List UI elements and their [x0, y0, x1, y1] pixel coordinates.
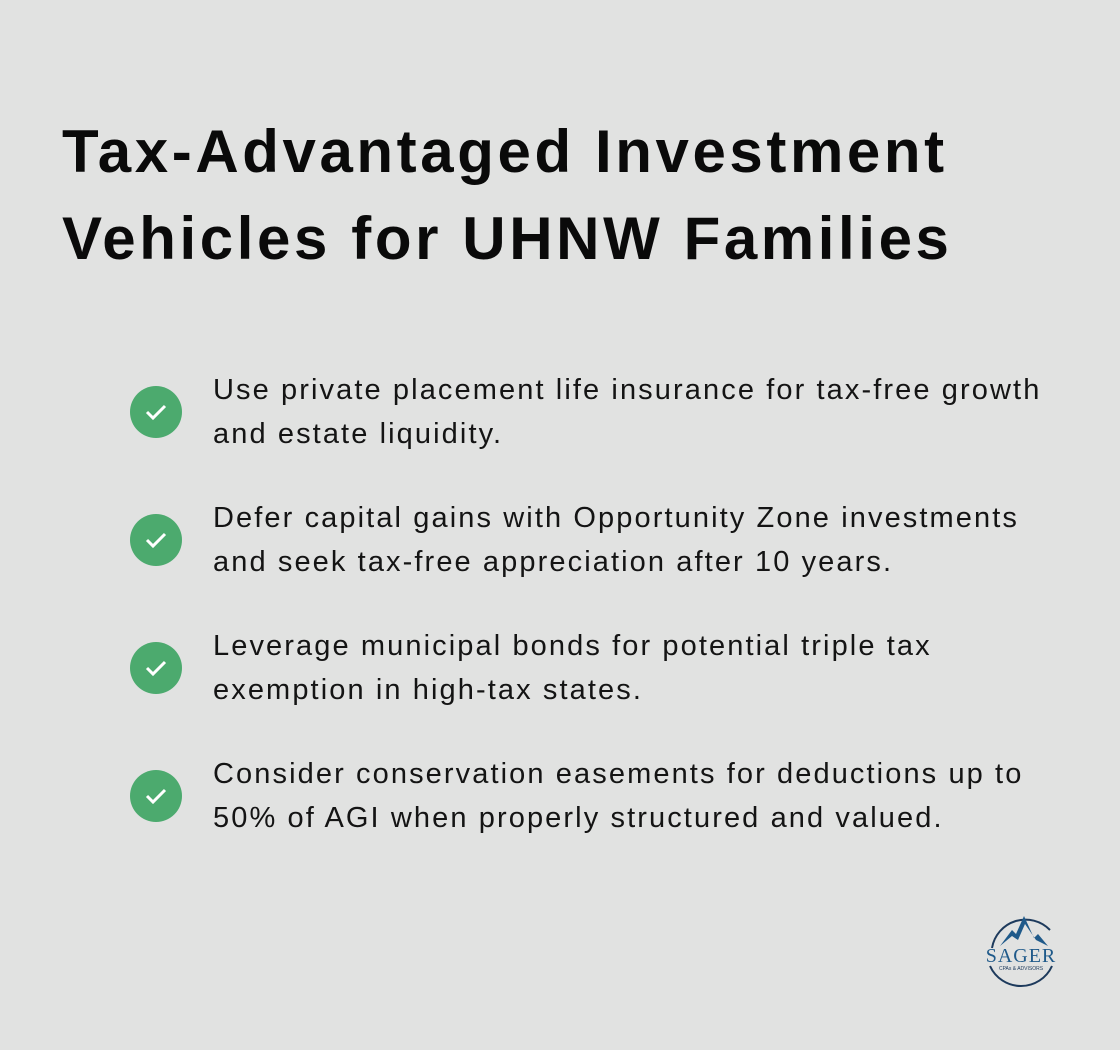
logo [986, 916, 1056, 987]
text 3: exemption in high-tax states. [213, 674, 643, 706]
item 1 [130, 374, 1041, 450]
text 2 [213, 502, 1019, 578]
text 4 [213, 758, 1023, 834]
text 1: Use private placement life insurance for tax-free growth [213, 374, 1041, 406]
text 3: Leverage municipal bonds for potential triple tax [213, 630, 932, 662]
icon: check [130, 770, 182, 822]
text 4: Consider conservation easements for deductions up to [213, 758, 1023, 790]
item 4 [130, 758, 1023, 834]
text 4: 50% of AGI when properly structured and valued. [213, 802, 944, 834]
icon: check [130, 642, 182, 694]
logo: CPAs & ADVISORS [999, 966, 1044, 972]
title [62, 118, 953, 272]
text 2: and seek tax-free appreciation after 10 years. [213, 546, 893, 578]
title: Vehicles for UHNW Families [62, 205, 953, 272]
text 1: and estate liquidity. [213, 418, 503, 450]
icon: check [130, 386, 182, 438]
icon: check [130, 514, 182, 566]
logo: SAGER [986, 945, 1056, 967]
text 2: Defer capital gains with Opportunity Zone investments [213, 502, 1019, 534]
text 3 [213, 630, 932, 706]
item 3 [130, 630, 932, 706]
title: Tax-Advantaged Investment [62, 118, 948, 185]
text 1 [213, 374, 1041, 450]
item 2 [130, 502, 1019, 578]
